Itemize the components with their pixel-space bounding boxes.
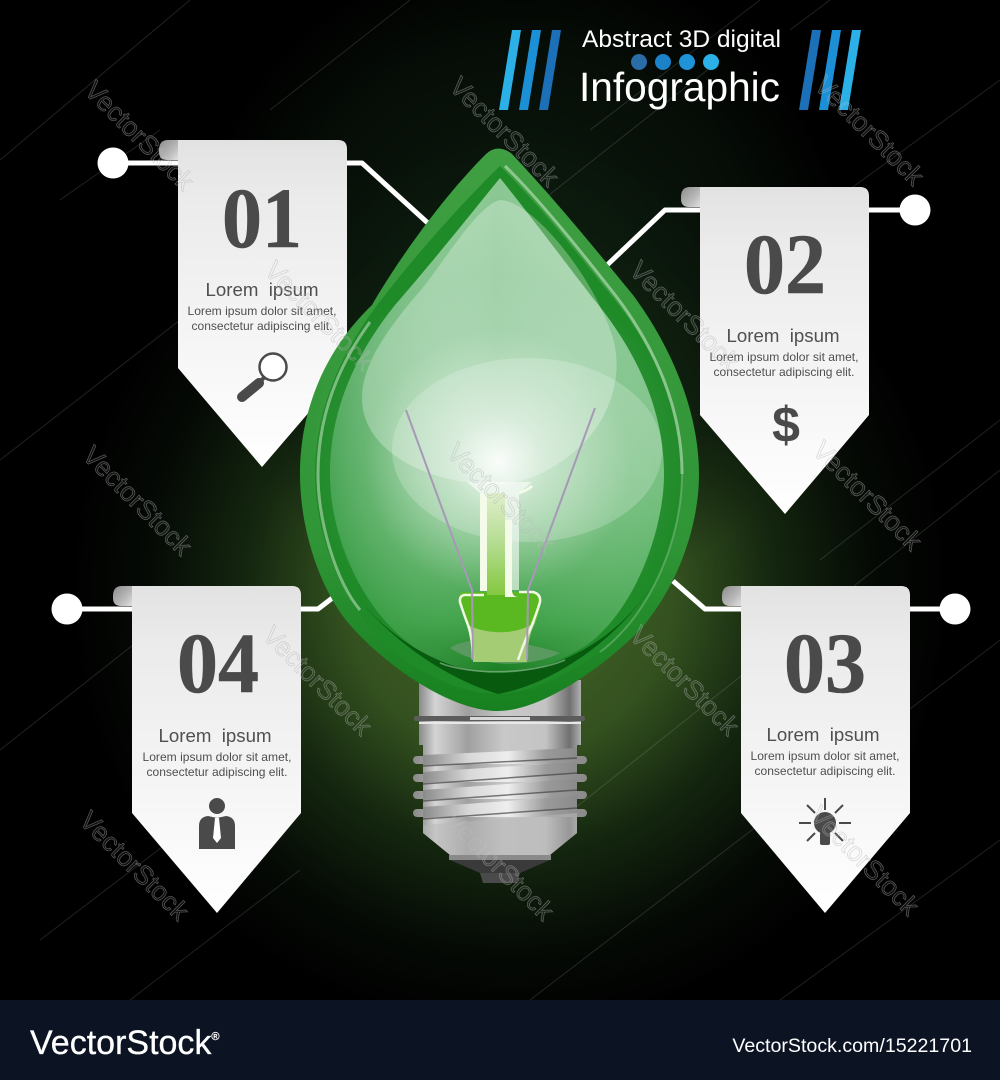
icon: person	[199, 798, 235, 849]
bottom ellipse	[450, 640, 560, 664]
watermarks: VectorStock	[624, 255, 745, 377]
lead wires	[406, 408, 595, 660]
ribbon body 04	[132, 586, 301, 913]
panel 04	[113, 586, 301, 913]
bulb rim	[300, 148, 699, 711]
panel 01	[159, 140, 347, 467]
helix bands	[423, 748, 577, 818]
ribbon body 03	[741, 586, 910, 913]
icon: light bulb	[799, 798, 851, 845]
upper reflection	[362, 200, 617, 484]
number 04: 04	[177, 615, 259, 711]
bottom dark band	[345, 580, 655, 694]
description 02: Lorem ipsum dolor sit amet,	[710, 350, 858, 364]
central glow	[308, 272, 688, 652]
watermarks: VectorStock	[79, 75, 200, 197]
panel 02: consectetur adipiscing elit.	[714, 365, 854, 379]
description 03: Lorem ipsum dolor sit amet,	[750, 749, 900, 763]
ribbon fold 04	[113, 586, 132, 606]
watermarks: VectorStock	[809, 70, 930, 192]
heading 03: Lorem ipsum	[766, 724, 880, 745]
footer url: VectorStock.com/15221701	[732, 1035, 972, 1057]
footer bar	[0, 1000, 1000, 1080]
panel 03	[722, 586, 910, 913]
ribbon body 01	[178, 140, 347, 467]
contact band	[449, 855, 551, 860]
bulb glass	[330, 178, 664, 673]
title block	[499, 26, 861, 110]
filament stem	[467, 482, 532, 597]
watermarks: VectorStock	[441, 437, 562, 559]
ribbon fold 02	[681, 187, 700, 207]
bulb inner band	[315, 166, 682, 694]
heading 04: Lorem ipsum	[158, 725, 272, 746]
collar ring	[414, 716, 585, 724]
icon: dollar: $	[772, 397, 800, 453]
panel 03: consectetur adipiscing elit.	[754, 764, 896, 778]
connector end dots	[52, 148, 970, 624]
heading 02: Lorem ipsum	[726, 325, 840, 346]
footer logo: VectorStock	[30, 1024, 211, 1062]
watermarks: VectorStock	[257, 620, 378, 742]
watermarks: VectorStock	[77, 440, 198, 562]
dots	[631, 54, 719, 70]
rim highlights	[318, 166, 682, 652]
watermarks: VectorStock	[807, 435, 928, 557]
panel 01: consectetur adipiscing elit.	[192, 319, 332, 333]
connector lines	[67, 163, 955, 609]
subtitle: Abstract 3D digital	[582, 26, 781, 53]
watermarks	[74, 70, 930, 927]
bulb screw base	[413, 680, 587, 883]
icon: magnifier	[242, 354, 286, 397]
lower glass edge	[440, 660, 565, 672]
panel 04: consectetur adipiscing elit.	[146, 765, 288, 779]
panel 02	[681, 187, 869, 514]
watermarks: VectorStock	[259, 255, 380, 377]
watermarks: VectorStock	[804, 800, 925, 922]
thread pills	[413, 756, 587, 817]
ribbon fold 03	[722, 586, 741, 606]
description 04: Lorem ipsum dolor sit amet,	[142, 750, 292, 764]
heading 01: Lorem ipsum	[206, 279, 318, 300]
ribbon fold 01	[159, 140, 178, 160]
glass side shading	[330, 178, 664, 673]
watermarks: VectorStock	[74, 805, 195, 927]
lower reflection	[392, 358, 662, 542]
neck glass	[460, 592, 540, 662]
watermarks: VectorStock	[439, 805, 560, 927]
number 03: 03	[784, 615, 866, 711]
number 01: 01	[222, 170, 302, 266]
ribbon body 02	[700, 187, 869, 514]
right stripes	[799, 30, 861, 110]
light bulb	[300, 148, 699, 883]
description 01: Lorem ipsum dolor sit amet,	[188, 304, 336, 318]
watermarks: VectorStock	[444, 71, 565, 193]
left stripes	[499, 30, 561, 110]
watermarks: VectorStock	[624, 620, 745, 742]
title: Infographic	[579, 64, 780, 110]
number 02: 02	[744, 216, 826, 312]
footer logo: ®	[211, 1031, 220, 1043]
